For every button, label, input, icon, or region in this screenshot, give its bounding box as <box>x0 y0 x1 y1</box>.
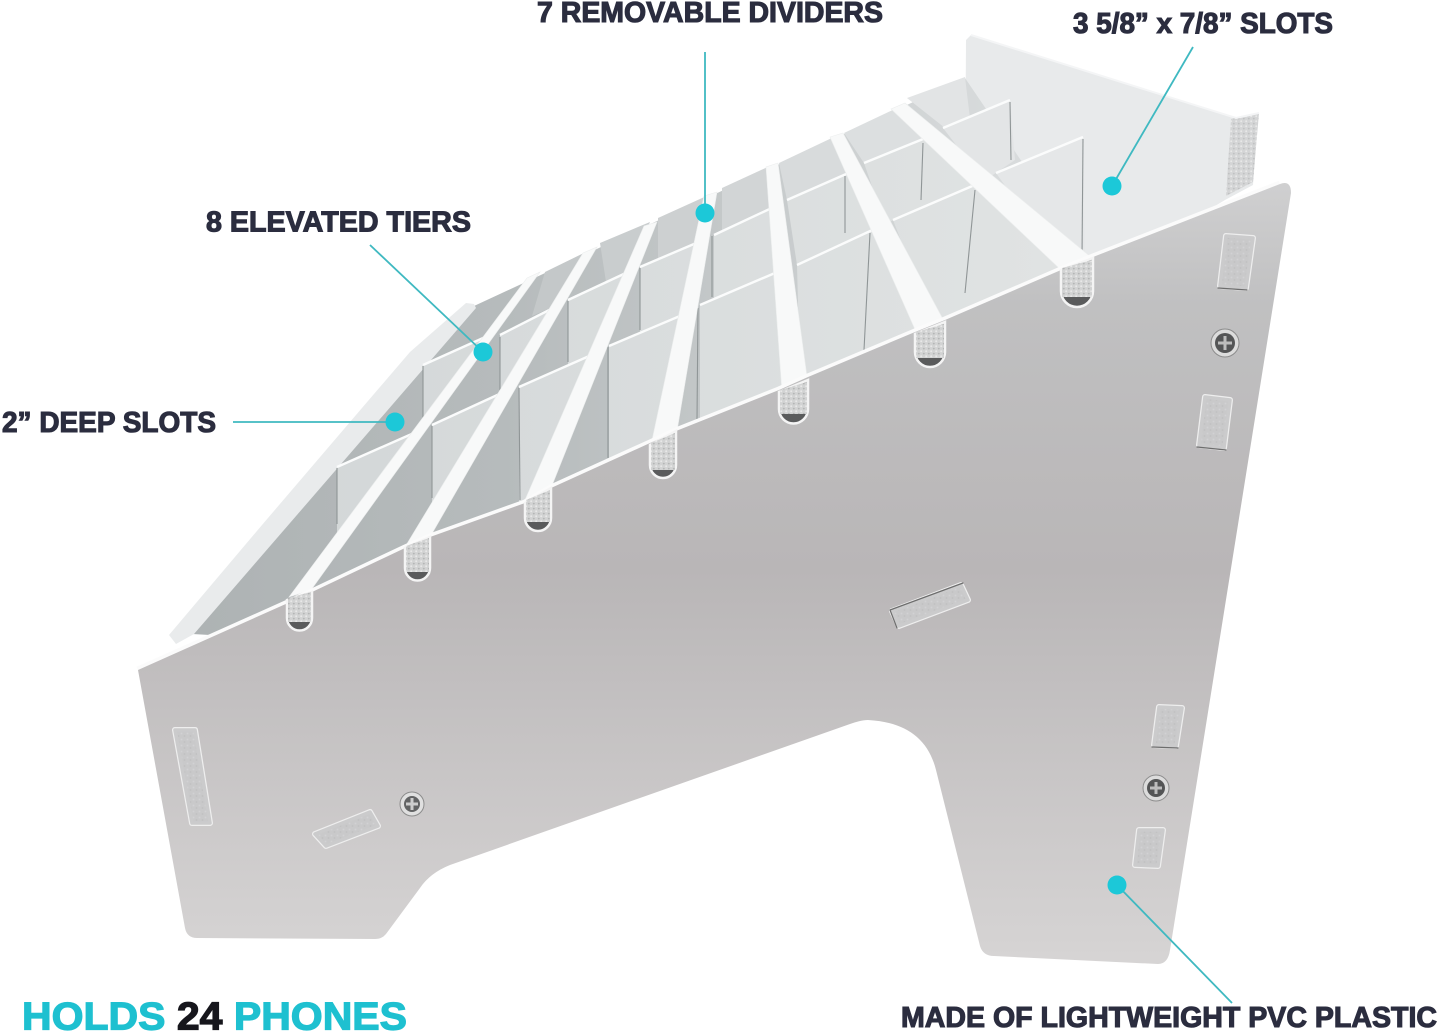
callout: slot size: 3 5/8” x 7/8” SLOTS <box>1073 8 1333 40</box>
screw: top right <box>1211 329 1239 357</box>
callout: 2 inch deep slots: 2” DEEP SLOTS <box>2 407 216 439</box>
back wall <box>965 35 1259 275</box>
callout: 7 removable dividers <box>537 0 883 222</box>
callout: slot size <box>1073 8 1333 196</box>
front tier cross dividers <box>337 137 1085 545</box>
side panel <box>138 183 1291 964</box>
panel top highlight <box>138 184 1280 670</box>
side rim <box>169 303 476 644</box>
callout: 8 elevated tiers <box>206 206 492 362</box>
callout: PVC plastic: MADE OF LIGHTWEIGHT PVC PLASTIC <box>901 1002 1437 1034</box>
callout: 8 elevated tiers: 8 ELEVATED TIERS <box>206 206 471 238</box>
slots in side panel <box>175 236 1253 866</box>
back row cells <box>532 77 972 316</box>
screw: lower right <box>1143 775 1169 801</box>
product: phone rack <box>138 35 1291 964</box>
callout: 2 inch deep slots <box>2 407 404 439</box>
tray interior base <box>192 78 1090 640</box>
screw: lower left <box>400 792 424 816</box>
notches with divider ends <box>287 258 1093 630</box>
removable dividers <box>289 103 1092 597</box>
callout: PVC plastic <box>901 876 1437 1034</box>
middle tier cross dividers <box>423 100 1015 429</box>
